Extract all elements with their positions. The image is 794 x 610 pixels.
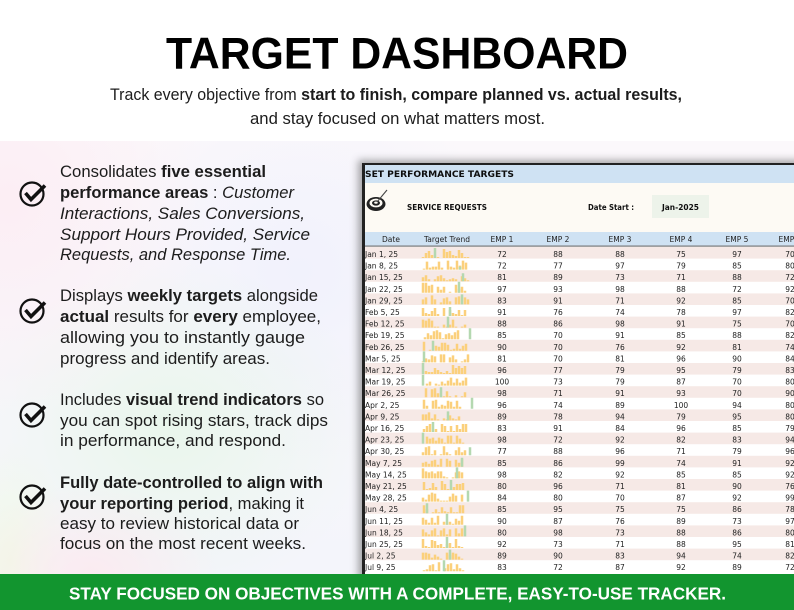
table rows: 84 xyxy=(615,424,625,433)
table rows: Feb 12, 25 xyxy=(365,320,405,329)
table rows: May 28, 25 xyxy=(365,494,407,503)
table rows: Jun 18, 25 xyxy=(364,528,403,537)
table rows: Apr 23, 25 xyxy=(365,436,404,445)
table rows: 97 xyxy=(497,285,507,294)
table rows: 98 xyxy=(615,285,625,294)
table rows: 87 xyxy=(553,517,563,526)
table rows: May 21, 25 xyxy=(365,482,407,491)
sheet header xyxy=(365,165,794,183)
feature: five performance areas: performance areas : Customer xyxy=(60,183,295,202)
table rows: May 7, 25 xyxy=(365,459,402,468)
table rows: Jan 1, 25 xyxy=(364,250,398,259)
table rows: 96 xyxy=(676,354,686,363)
table rows: 98 xyxy=(497,436,507,445)
table rows: 86 xyxy=(732,528,742,537)
icon: check 4 xyxy=(20,486,45,508)
table rows: 83 xyxy=(497,296,507,305)
table rows: Apr 9, 25 xyxy=(365,412,400,421)
sheet header: SET PERFORMANCE TARGETS xyxy=(365,170,514,180)
table rows: 98 xyxy=(497,389,507,398)
table column headers: EMP 4 xyxy=(670,235,693,244)
table rows: 75 xyxy=(732,320,742,329)
table rows: 88 xyxy=(676,285,686,294)
table rows: 77 xyxy=(553,366,563,375)
feature: weekly targets: progress and identify areas. xyxy=(60,349,270,368)
table rows: 80 xyxy=(497,528,507,537)
table rows: 78 xyxy=(553,412,563,421)
subtitle xyxy=(110,86,682,128)
table rows: 89 xyxy=(553,273,563,282)
table rows: Feb 5, 25 xyxy=(365,308,400,317)
table rows: 98 xyxy=(497,470,507,479)
table rows: 84 xyxy=(497,494,507,503)
table rows: 79 xyxy=(676,262,686,271)
table rows: 75 xyxy=(676,505,686,514)
table rows: 72 xyxy=(497,262,507,271)
table rows: 73 xyxy=(553,540,563,549)
table rows: 95 xyxy=(732,412,742,421)
table rows: 91 xyxy=(615,331,625,340)
table rows: 79 xyxy=(732,366,742,375)
table rows: 73 xyxy=(553,378,563,387)
table rows: 89 xyxy=(497,552,507,561)
table rows: 85 xyxy=(497,331,507,340)
feature: date controlled: your reporting period, making it xyxy=(60,494,304,513)
table rows: 92 xyxy=(615,436,625,445)
table rows: 97 xyxy=(615,262,625,271)
table rows: 86 xyxy=(553,320,563,329)
table rows: 71 xyxy=(676,447,686,456)
table rows: 81 xyxy=(732,343,742,352)
feature: weekly targets: allowing you to instantly gauge xyxy=(60,328,305,347)
table rows: Apr 2, 25 xyxy=(365,401,400,410)
table column headers: EMP 1 xyxy=(491,235,514,244)
table rows: 79 xyxy=(732,447,742,456)
table column headers: EMP 2 xyxy=(547,235,570,244)
table rows: 70 xyxy=(615,494,625,503)
table rows: 92 xyxy=(615,470,625,479)
table rows: 71 xyxy=(676,273,686,282)
control band xyxy=(365,183,794,232)
table rows: 92 xyxy=(676,563,686,572)
table row stripes xyxy=(365,247,794,560)
table rows: 79 xyxy=(615,366,625,375)
table column headers: EMP 5 xyxy=(726,235,749,244)
table rows: 70 xyxy=(732,378,742,387)
table rows: 91 xyxy=(553,424,563,433)
table rows: 88 xyxy=(676,540,686,549)
table rows: 100 xyxy=(495,378,509,387)
table rows: Jan 22, 25 xyxy=(364,285,403,294)
feature: five performance areas: Support Hours Provided, Service xyxy=(60,225,310,244)
table rows: 88 xyxy=(553,447,563,456)
table rows: 88 xyxy=(676,528,686,537)
table rows: 98 xyxy=(553,528,563,537)
feature: weekly targets xyxy=(60,286,321,368)
table rows xyxy=(364,250,794,572)
table rows: 86 xyxy=(553,459,563,468)
table rows: 85 xyxy=(732,296,742,305)
table rows: 85 xyxy=(497,459,507,468)
table rows: 73 xyxy=(615,528,625,537)
table rows: 70 xyxy=(553,354,563,363)
table rows: 81 xyxy=(497,354,507,363)
table rows: 94 xyxy=(732,401,742,410)
table rows: 96 xyxy=(497,366,507,375)
footer banner: STAY FOCUSED ON OBJECTIVES WITH A COMPLETE, EASY-TO-USE TRACKER. xyxy=(69,584,726,604)
table rows: 74 xyxy=(553,401,563,410)
table rows: Apr 30, 25 xyxy=(365,447,404,456)
table rows: 88 xyxy=(732,331,742,340)
table rows: Jan 8, 25 xyxy=(364,262,398,271)
subtitle: Track every objective from start to finish, compare planned vs. actual results, xyxy=(110,86,682,104)
table rows: 96 xyxy=(497,401,507,410)
table rows: 85 xyxy=(732,262,742,271)
table rows: 82 xyxy=(676,436,686,445)
feature: date controlled xyxy=(60,473,323,553)
table rows: 70 xyxy=(553,343,563,352)
table rows: 73 xyxy=(732,517,742,526)
table rows: 91 xyxy=(615,389,625,398)
table rows: 70 xyxy=(553,331,563,340)
table rows: 95 xyxy=(676,366,686,375)
table column headers: Date xyxy=(382,235,400,244)
icon: check 2 xyxy=(20,300,45,322)
table rows: 74 xyxy=(615,308,625,317)
table rows: 81 xyxy=(615,354,625,363)
table rows: Jun 25, 25 xyxy=(364,540,403,549)
table rows: 72 xyxy=(553,436,563,445)
table rows: 90 xyxy=(497,343,507,352)
table rows: 83 xyxy=(497,563,507,572)
table rows: 72 xyxy=(732,285,742,294)
table rows: 75 xyxy=(676,250,686,259)
table rows: 77 xyxy=(553,262,563,271)
dashboard shadow xyxy=(358,160,794,580)
table rows: 72 xyxy=(553,563,563,572)
feature: five performance areas: Requests, and Response Time. xyxy=(60,245,291,264)
table rows: 88 xyxy=(497,320,507,329)
feature: visual trend indicators: you can spot rising stars, track dips xyxy=(60,411,328,430)
table rows: 85 xyxy=(497,505,507,514)
table rows: 71 xyxy=(615,296,625,305)
table rows: 93 xyxy=(553,285,563,294)
icon: target with dart xyxy=(366,190,387,211)
table rows: 85 xyxy=(732,424,742,433)
table rows: 80 xyxy=(553,494,563,503)
table rows: Mar 5, 25 xyxy=(365,354,401,363)
table rows: 76 xyxy=(615,343,625,352)
table rows: 81 xyxy=(497,273,507,282)
table rows: 85 xyxy=(676,331,686,340)
feature list xyxy=(60,162,328,553)
table rows: 79 xyxy=(615,378,625,387)
table rows: Jul 2, 25 xyxy=(364,552,396,561)
table rows: 82 xyxy=(553,470,563,479)
feature: weekly targets: Displays weekly targets alongside xyxy=(60,286,318,305)
table rows: 89 xyxy=(732,563,742,572)
table rows: 80 xyxy=(497,482,507,491)
table rows: Feb 26, 25 xyxy=(365,343,405,352)
table rows: 83 xyxy=(732,436,742,445)
table rows: 96 xyxy=(676,424,686,433)
table rows: 93 xyxy=(676,389,686,398)
table rows: 87 xyxy=(615,563,625,572)
table column headers: EMP 3 xyxy=(609,235,632,244)
table rows: 91 xyxy=(676,320,686,329)
table rows: 83 xyxy=(615,552,625,561)
control band: Date Start : xyxy=(588,203,634,212)
table rows: 89 xyxy=(497,412,507,421)
table rows: Feb 19, 25 xyxy=(365,331,405,340)
table rows: 88 xyxy=(732,273,742,282)
footer banner xyxy=(0,574,794,610)
feature: five performance areas: Interactions, Sales Conversions, xyxy=(60,204,305,223)
table rows: 92 xyxy=(676,296,686,305)
table rows: 74 xyxy=(676,459,686,468)
table rows: 81 xyxy=(676,482,686,491)
table rows: 95 xyxy=(553,505,563,514)
table rows: 71 xyxy=(615,482,625,491)
feature: visual trend indicators: in performance, and respond. xyxy=(60,431,286,450)
table rows: Jan 29, 25 xyxy=(364,296,403,305)
feature: date controlled: Fully date-controlled to align with xyxy=(60,473,323,492)
table rows: 96 xyxy=(615,447,625,456)
table rows: 73 xyxy=(615,273,625,282)
title: TARGET DASHBOARD xyxy=(166,30,628,78)
table rows: May 14, 25 xyxy=(365,470,407,479)
target trend sparklines xyxy=(423,248,472,571)
table rows: 99 xyxy=(615,459,625,468)
table rows: Apr 16, 25 xyxy=(365,424,404,433)
feature: five performance areas xyxy=(60,162,310,264)
table rows: 88 xyxy=(615,250,625,259)
table rows: 100 xyxy=(674,401,688,410)
pastel background panel xyxy=(0,141,794,574)
table rows: 85 xyxy=(676,470,686,479)
control band: Jan-2025 xyxy=(661,203,699,212)
table rows: 88 xyxy=(553,250,563,259)
table rows: 78 xyxy=(676,308,686,317)
feature: date controlled: focus on the most recent weeks. xyxy=(60,534,306,553)
table rows: Jul 9, 25 xyxy=(364,563,396,572)
table rows: 94 xyxy=(615,412,625,421)
feature: visual trend indicators: Includes visual trend indicators so xyxy=(60,390,324,409)
table rows: 90 xyxy=(732,482,742,491)
subtitle: and stay focused on what matters most. xyxy=(250,110,545,128)
table rows: 96 xyxy=(553,482,563,491)
panel: spreadsheet xyxy=(362,163,794,574)
table column headers xyxy=(365,232,794,247)
table rows: 71 xyxy=(553,389,563,398)
feature: five performance areas: Consolidates five essential xyxy=(60,162,266,181)
table rows: 92 xyxy=(732,494,742,503)
table rows: Jun 11, 25 xyxy=(364,517,403,526)
table rows: 77 xyxy=(497,447,507,456)
table rows: 83 xyxy=(497,424,507,433)
control band: SERVICE REQUESTS xyxy=(407,203,487,212)
table rows: 71 xyxy=(615,540,625,549)
table rows: 91 xyxy=(497,308,507,317)
table rows: 75 xyxy=(615,505,625,514)
table rows: 76 xyxy=(553,308,563,317)
table rows: 92 xyxy=(497,540,507,549)
table rows: Mar 12, 25 xyxy=(365,366,406,375)
table rows: 97 xyxy=(732,250,742,259)
table rows: 91 xyxy=(732,459,742,468)
table rows: 89 xyxy=(676,517,686,526)
table column headers: Target Trend xyxy=(423,235,470,244)
table rows: 76 xyxy=(615,517,625,526)
table rows: 98 xyxy=(615,320,625,329)
icon: check 3 xyxy=(20,404,45,426)
feature: weekly targets: actual results for every employee, xyxy=(60,307,321,326)
table rows: 89 xyxy=(615,401,625,410)
table rows: 90 xyxy=(497,517,507,526)
green highlight bars xyxy=(423,248,472,571)
table rows: 90 xyxy=(553,552,563,561)
table rows: 74 xyxy=(732,552,742,561)
table rows: 72 xyxy=(497,250,507,259)
table rows: Jun 4, 25 xyxy=(364,505,398,514)
table rows: 79 xyxy=(676,412,686,421)
table rows: 85 xyxy=(732,470,742,479)
feature: date controlled: easy to review historical data or xyxy=(60,514,299,533)
table rows: 97 xyxy=(732,308,742,317)
table rows: 95 xyxy=(732,540,742,549)
table rows: 87 xyxy=(676,378,686,387)
table rows: Mar 26, 25 xyxy=(365,389,406,398)
table rows: 94 xyxy=(676,552,686,561)
feature: visual trend indicators xyxy=(60,390,328,450)
table rows: 70 xyxy=(732,389,742,398)
table rows: Jan 15, 25 xyxy=(364,273,403,282)
table rows: 90 xyxy=(732,354,742,363)
table rows: Mar 19, 25 xyxy=(365,378,406,387)
table rows: 92 xyxy=(676,343,686,352)
table rows: 86 xyxy=(732,505,742,514)
table rows: 87 xyxy=(676,494,686,503)
table rows: 91 xyxy=(553,296,563,305)
icon: check 1 xyxy=(20,182,45,206)
